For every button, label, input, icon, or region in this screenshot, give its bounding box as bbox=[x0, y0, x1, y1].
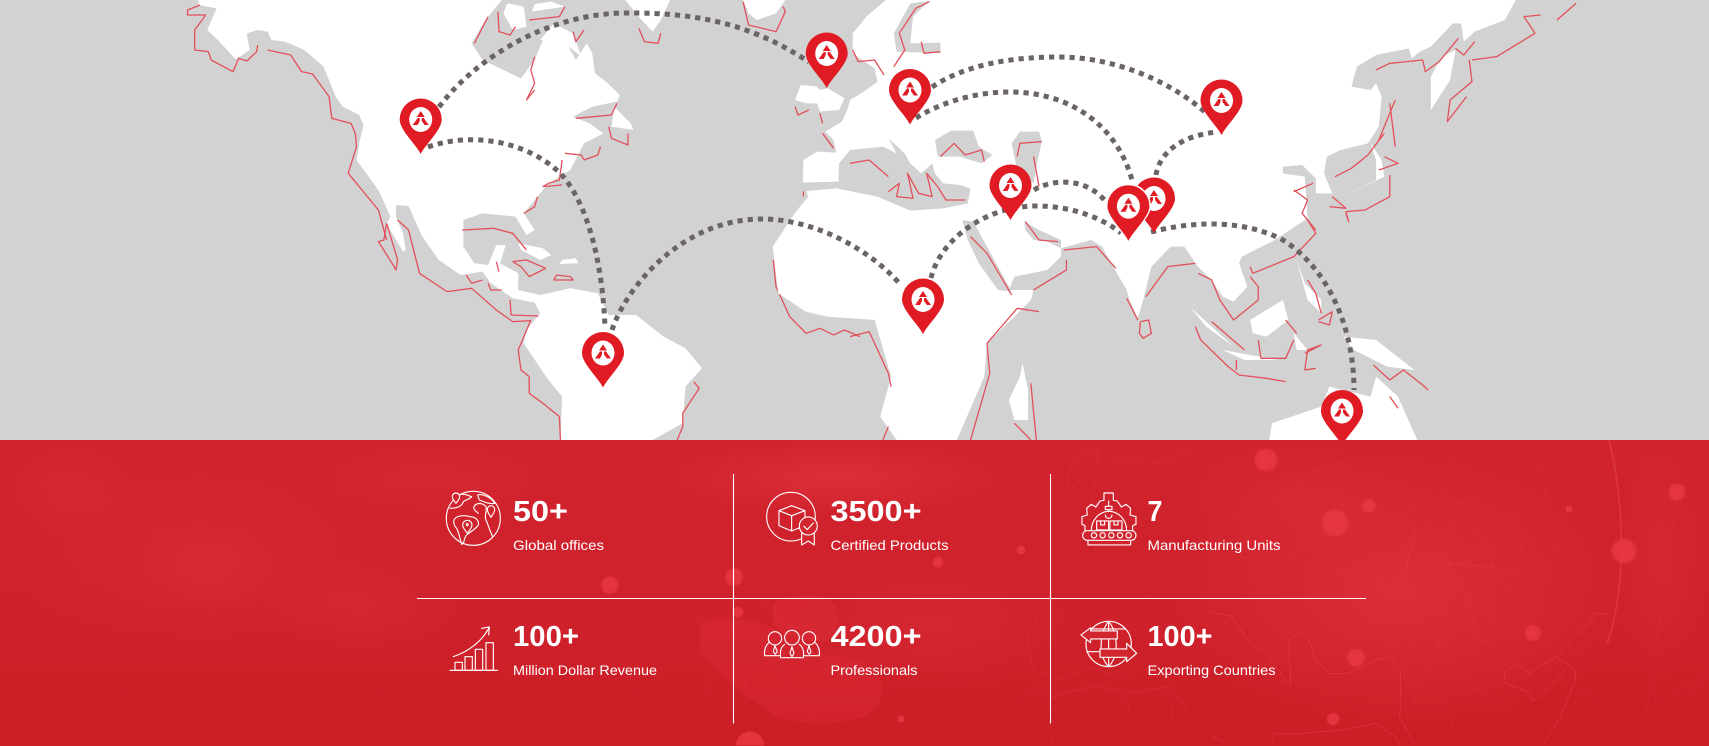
location pin: Australia bbox=[1321, 390, 1363, 446]
location pin: East Africa bbox=[902, 278, 944, 334]
icon: growth chart bbox=[450, 627, 498, 670]
panel: red statistics band bbox=[0, 440, 1709, 746]
label: Exporting Countries bbox=[1148, 662, 1276, 678]
map: Americas bbox=[188, 0, 860, 440]
location pin: Middle East bbox=[990, 164, 1032, 220]
stat: professionals bbox=[764, 621, 922, 678]
dotted route arcs bbox=[428, 13, 1354, 390]
panel: world map bbox=[186, 0, 1576, 440]
decorative continent outlines bbox=[1209, 440, 1621, 745]
label: Global offices bbox=[513, 537, 604, 553]
location pin: United Kingdom bbox=[806, 32, 848, 88]
stat: exporting countries bbox=[1081, 621, 1276, 678]
location pin: North America bbox=[400, 98, 442, 154]
location pin: Central Asia bbox=[1200, 80, 1242, 135]
icon: certified box bbox=[767, 492, 817, 545]
soft background glows bbox=[0, 440, 1709, 730]
label: Manufacturing Units bbox=[1148, 537, 1280, 553]
value: 3500+ bbox=[830, 496, 922, 528]
location pin: India east bbox=[1138, 178, 1175, 233]
label: Certified Products bbox=[830, 537, 948, 553]
value: 4200+ bbox=[830, 621, 922, 653]
decorative bokeh dots bbox=[600, 447, 1686, 746]
stat: certified products bbox=[767, 492, 948, 553]
location pin: South America bbox=[582, 332, 624, 388]
map: Europe, Africa, Asia, Oceania bbox=[773, 0, 1576, 440]
stat: million dollar revenue bbox=[450, 621, 657, 678]
value: 50+ bbox=[513, 496, 568, 528]
swoosh bbox=[773, 595, 838, 642]
decorative mesh under centre cells bbox=[1067, 448, 1100, 488]
label: Million Dollar Revenue bbox=[513, 662, 657, 678]
location pin: India west bbox=[1106, 184, 1151, 242]
label: Professionals bbox=[830, 662, 918, 678]
icon: group of people bbox=[764, 630, 819, 658]
stat: global offices bbox=[446, 491, 604, 553]
grid dividers bbox=[417, 474, 1366, 724]
value: 100+ bbox=[513, 621, 579, 653]
icon: globe with exchange arrows bbox=[1081, 621, 1137, 667]
location pin: Central Europe bbox=[889, 69, 931, 124]
icon: globe with pins bbox=[446, 491, 500, 545]
value: 100+ bbox=[1148, 621, 1212, 653]
icon: factory gear and conveyor bbox=[1082, 493, 1136, 545]
value: 7 bbox=[1148, 496, 1162, 528]
decorative network mesh bbox=[1209, 440, 1709, 746]
stat: manufacturing units bbox=[1082, 493, 1280, 553]
